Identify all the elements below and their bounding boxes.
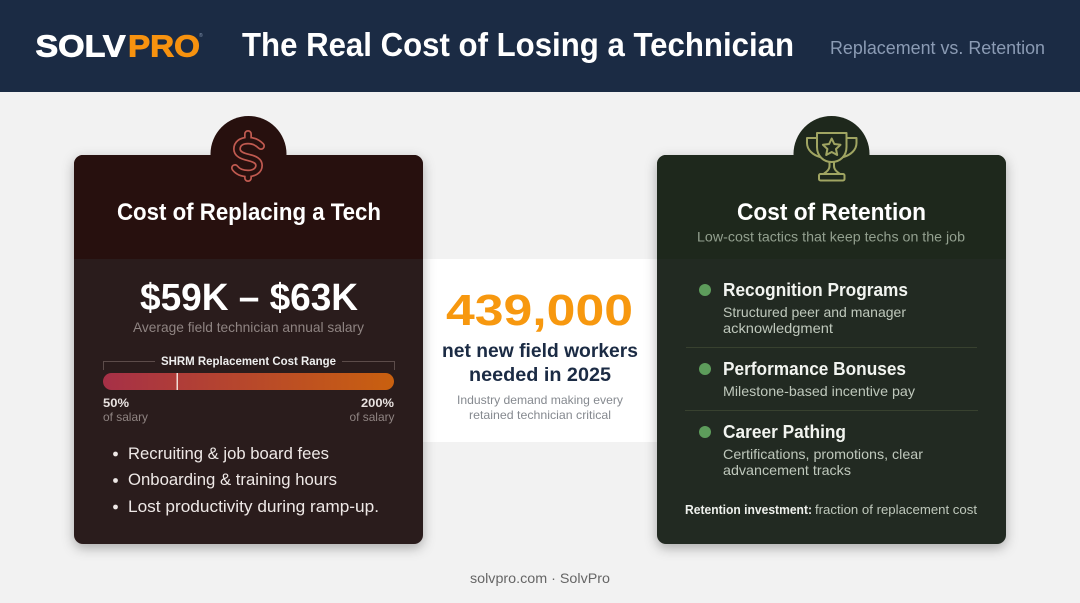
callout: workers needed: retained technician critical	[469, 408, 611, 422]
cost bullets	[113, 444, 379, 516]
icon: dollar sign	[235, 134, 261, 178]
salary caption: Average field technician annual salary	[133, 319, 364, 335]
callout: workers needed: net new field workers	[442, 341, 638, 362]
range bar: of salary	[350, 410, 394, 424]
callout: workers needed: 439,000	[446, 286, 633, 335]
retention note: Retention investment:	[685, 503, 812, 517]
item: career pathing: Career Pathing	[723, 422, 846, 442]
card heading: Cost of Retention	[737, 199, 926, 226]
footer: solvpro.com · SolvPro	[470, 570, 610, 586]
cost bullets: Recruiting & job board fees	[128, 444, 329, 463]
range bar: 50%	[103, 396, 129, 410]
item: career pathing: advancement tracks	[723, 462, 851, 478]
retention note: fraction of replacement cost	[815, 503, 978, 517]
item: performance bonuses	[699, 359, 915, 399]
callout: workers needed: needed in 2025	[469, 365, 611, 386]
title: The Real Cost of Losing a Technician	[242, 26, 794, 63]
item: recognition programs: acknowledgment	[723, 320, 833, 336]
icon: trophy	[807, 133, 856, 180]
cost bullets: Lost productivity during ramp-up.	[128, 497, 379, 516]
center panel background	[423, 259, 657, 442]
range bar	[103, 354, 394, 424]
range bar: SHRM Replacement Cost Range	[161, 354, 336, 368]
item: performance bonuses: Milestone-based incentive pay	[723, 383, 915, 399]
retention note	[685, 503, 978, 517]
callout: workers needed: Industry demand making every	[457, 393, 623, 407]
callout: workers needed	[442, 286, 638, 422]
item: career pathing: Certifications, promotions, clear	[723, 446, 923, 462]
item: recognition programs	[699, 280, 908, 336]
card subheading: Low-cost tactics that keep techs on the job	[697, 228, 965, 244]
logo	[36, 28, 203, 64]
logo: SOLV	[36, 28, 126, 64]
subtitle: Replacement vs. Retention	[830, 38, 1045, 58]
item: recognition programs: Recognition Programs	[723, 280, 908, 300]
salary figure: $59K – $63K	[140, 277, 359, 319]
panel: cost of replacing	[74, 116, 423, 544]
logo: PRO	[128, 28, 200, 64]
panel: cost of retention	[657, 116, 1006, 544]
cost bullets: Onboarding & training hours	[128, 470, 337, 489]
range bar: 200%	[361, 396, 394, 410]
logo: ®	[199, 32, 203, 39]
item: career pathing	[699, 422, 923, 478]
header band	[0, 0, 1080, 92]
item: recognition programs: Structured peer and manager	[723, 304, 906, 320]
item: performance bonuses: Performance Bonuses	[723, 359, 906, 379]
card heading: Cost of Replacing a Tech	[117, 199, 381, 226]
range bar: of salary	[103, 410, 148, 424]
